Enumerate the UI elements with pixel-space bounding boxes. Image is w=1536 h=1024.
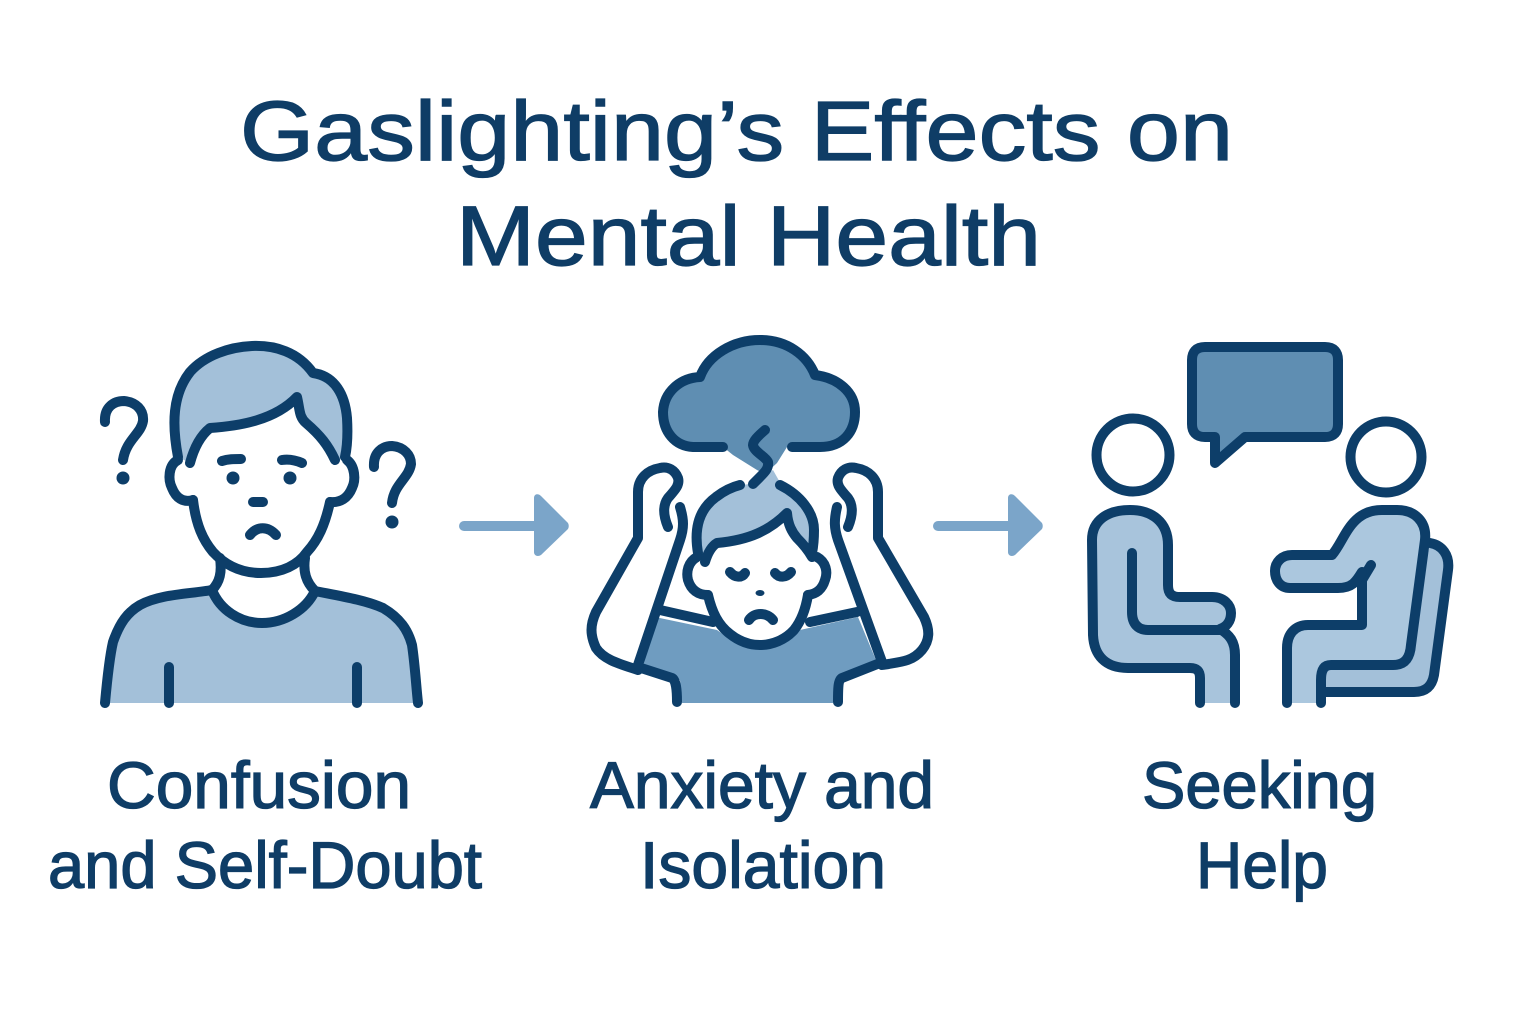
hair: [174, 346, 347, 463]
arms: [592, 467, 678, 670]
icon: confused person: [105, 346, 418, 703]
hair: [697, 470, 814, 562]
label: confusion and self-doubt: Confusion: [107, 748, 411, 822]
chair back: [1321, 543, 1448, 692]
label: anxiety and isolation: Anxiety and: [590, 748, 934, 822]
right person head: [1350, 422, 1422, 492]
label: anxiety and isolation: Isolation: [640, 828, 886, 902]
right person body: [1275, 510, 1425, 703]
arrow: first to second: [464, 494, 569, 556]
title: Gaslighting’s Effects on: [240, 84, 1233, 178]
icon: anxious person under storm cloud: [592, 340, 928, 703]
label: anxiety and isolation: [590, 748, 934, 902]
arrow: second to third: [938, 494, 1043, 556]
label: confusion and self-doubt: [48, 748, 482, 902]
title: Mental Health: [456, 189, 1041, 283]
shirt: [643, 617, 878, 703]
face: [190, 397, 335, 463]
storm cloud: [663, 340, 855, 474]
label: seeking help: Help: [1196, 828, 1328, 902]
title: [240, 84, 1233, 283]
question marks: [105, 401, 143, 460]
shirt: [105, 590, 418, 703]
facial features: [222, 459, 302, 502]
ears: [170, 460, 193, 501]
left person head: [1096, 418, 1170, 492]
label: seeking help: [1142, 748, 1377, 902]
label: confusion and self-doubt: and Self-Doubt: [48, 828, 482, 902]
icon: therapy conversation: [1092, 347, 1448, 703]
label: seeking help: Seeking: [1142, 748, 1377, 822]
lightning: [753, 430, 768, 484]
left person body: [1092, 510, 1235, 703]
speech bubble: [1192, 347, 1338, 463]
face: [708, 595, 808, 645]
